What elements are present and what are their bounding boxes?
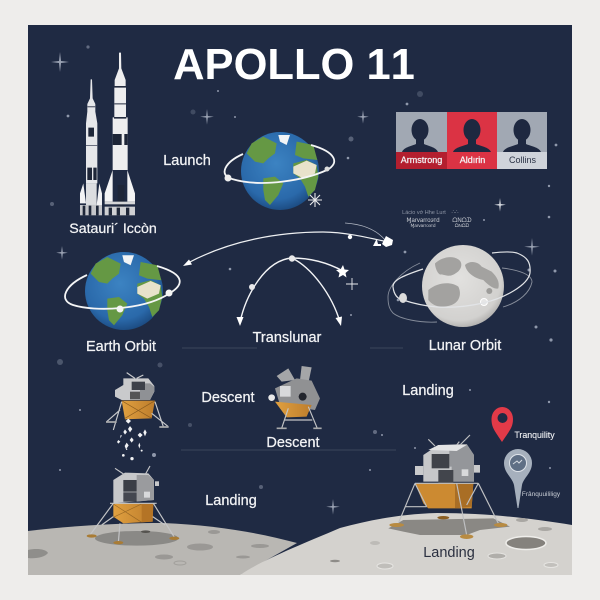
illustration: lunar module descending: [106, 373, 169, 430]
label: garbled Tranquility: Frânquuililigy: [522, 491, 561, 498]
moon surface: right hill: [240, 513, 572, 575]
icon: large rocket: [105, 53, 135, 215]
starfield: [50, 45, 557, 489]
label: Translunar: Translunar: [253, 330, 322, 346]
illustration: lunar module landed left: [87, 466, 179, 546]
icon: red location pin: [492, 407, 513, 442]
label: Launch: Launch: [163, 153, 211, 169]
label: Earth Orbit: Earth Orbit: [86, 339, 156, 355]
small caption text: Ɱаrvаrгоэтd: [411, 223, 436, 228]
label: Descent: Descent: [201, 390, 255, 406]
crew names: [401, 155, 537, 165]
dividers: [181, 348, 403, 450]
illustration: lunar module landed right: [388, 435, 510, 539]
moon surface: left hill: [28, 523, 297, 575]
panel: crew portraits: [396, 112, 547, 169]
crew names: Aldırin: [460, 155, 485, 165]
crew names: Armstrong: [401, 155, 442, 165]
label: Landing on surface: Landing: [423, 545, 475, 561]
icon: plus star: [346, 278, 358, 290]
title: APOLLO 11: [173, 41, 415, 89]
label: Lunar Orbit: Lunar Orbit: [429, 338, 501, 354]
label: Landing middle-left: Landing: [205, 493, 257, 509]
illustration: Earth with launch orbit: [224, 132, 334, 210]
small caption text: ∴∴: [452, 210, 459, 216]
small caption text: Ɱаrvаrгоэтd: [406, 217, 440, 224]
label: Tranquility: Tranquility: [514, 430, 555, 440]
label: Descent lower: Descent: [266, 435, 320, 451]
small caption text: ᗝNᗝᗪ: [452, 217, 472, 224]
small caption text: [402, 210, 472, 228]
icon: grey location pin: [504, 449, 532, 508]
illustration: lunar module tilted: [268, 366, 322, 428]
exhaust particles: [117, 419, 156, 460]
icon: small rocket: [80, 79, 102, 215]
label: Saturn icon: Satauri´ Iccòn: [69, 221, 157, 237]
portrait silhouettes: [402, 119, 541, 152]
arrow: return trajectory: [183, 223, 393, 266]
label: Landing upper-right: Landing: [402, 383, 454, 399]
illustration: Moon with orbit: [388, 245, 532, 327]
sparkle stars: [51, 52, 540, 515]
small caption text: Lácio vớ Hhe Lurt: [402, 210, 446, 216]
arrows: translunar trajectory: [236, 255, 349, 326]
crew names: Collins: [509, 155, 537, 165]
illustration: Earth orbit: [65, 252, 180, 330]
small caption text: ᗝNᗝᗪ: [455, 223, 469, 228]
